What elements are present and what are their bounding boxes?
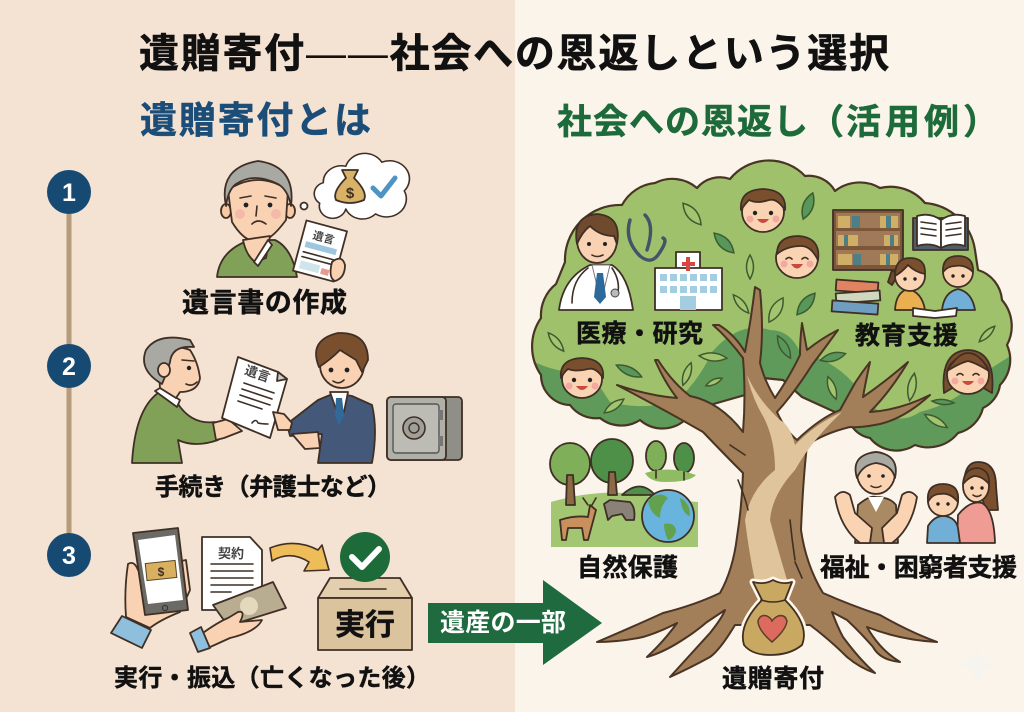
title: 遺贈寄付——社会への恩返しという選択 (139, 32, 889, 76)
will document: 遺言 (311, 228, 336, 247)
icon: stethoscope (628, 215, 665, 260)
cluster: medical and research (559, 214, 722, 310)
icon: nature scene (550, 439, 698, 547)
leaves (546, 191, 997, 431)
deer (560, 498, 596, 540)
icon: sparkle (958, 647, 996, 685)
child face middle (776, 236, 818, 278)
icon: stacked books (832, 280, 880, 315)
will document handed over (222, 357, 287, 438)
thought bubble with money (300, 153, 409, 219)
banknote and hand (190, 582, 286, 652)
thought bubble with money: $ (346, 185, 355, 202)
step number 3 (47, 533, 91, 577)
light stripe on trunk (745, 375, 842, 590)
label: nature conservation: 自然保護 (577, 554, 678, 582)
bark marks (730, 445, 802, 578)
label: bequest donation root: 遺贈寄付 (722, 665, 824, 693)
step number 3: 3 (62, 542, 76, 570)
will document (293, 220, 347, 282)
arrow: part of the estate: 遺産の一部 (440, 609, 566, 637)
heading: about bequest donation: 遺贈寄付とは (140, 100, 371, 141)
collection box (318, 578, 412, 650)
mother and child (927, 462, 998, 543)
icon: elder writing a will (217, 153, 409, 282)
contract document: 契約 (218, 546, 244, 561)
label: will creation: 遺言書の作成 (182, 288, 347, 318)
icon: safe (387, 397, 462, 460)
will document handed over: 遺言 (243, 362, 272, 385)
elder in hands (835, 452, 917, 543)
contract document (202, 537, 262, 610)
icon: handing over will to lawyer (132, 333, 462, 463)
child face right girl (944, 350, 992, 394)
icon: bookshelf (833, 210, 903, 270)
label: medical and research: 医療・研究 (576, 320, 703, 348)
label: education support: 教育支援 (855, 322, 958, 350)
icon: money bag with heart (743, 580, 804, 655)
arrow: yellow curved (270, 543, 329, 571)
icon: hospital (655, 252, 722, 310)
child face top (741, 189, 785, 232)
icon: open book (913, 215, 968, 250)
bear (604, 500, 634, 520)
timeline: numbered steps (47, 170, 91, 577)
panel: left background (0, 0, 515, 712)
hand with phone: $ (158, 565, 165, 579)
forest trees (550, 439, 696, 505)
icon: doctor (559, 214, 633, 310)
label: execution and transfer: 実行・振込（亡くなった後） (114, 665, 430, 692)
icon: check badge (340, 532, 390, 582)
label: procedure: 手続き（弁護士など） (155, 474, 391, 501)
step number 1: 1 (62, 179, 76, 207)
label: welfare and poverty support: 福祉・困窮者支援 (820, 554, 1017, 582)
arrow: part of the estate (428, 580, 602, 665)
cluster: children faces (561, 189, 992, 398)
icon: execution and transfer (111, 528, 412, 652)
step number 2: 2 (62, 353, 76, 381)
collection box: 実行 (335, 609, 395, 642)
canopy (530, 161, 1020, 460)
hand with phone (111, 528, 190, 648)
globe (642, 490, 694, 542)
step number 1 (47, 170, 91, 214)
child face left (561, 358, 603, 398)
panel: right background (515, 0, 1024, 712)
heading: giving back to society: 社会への恩返し（活用例） (557, 103, 999, 142)
icon: welfare people (835, 452, 998, 543)
tree illustration (530, 161, 1020, 677)
icon: children studying (888, 256, 975, 318)
cluster: education support (832, 210, 975, 318)
trunk and branches (597, 287, 937, 677)
step number 2 (47, 344, 91, 388)
